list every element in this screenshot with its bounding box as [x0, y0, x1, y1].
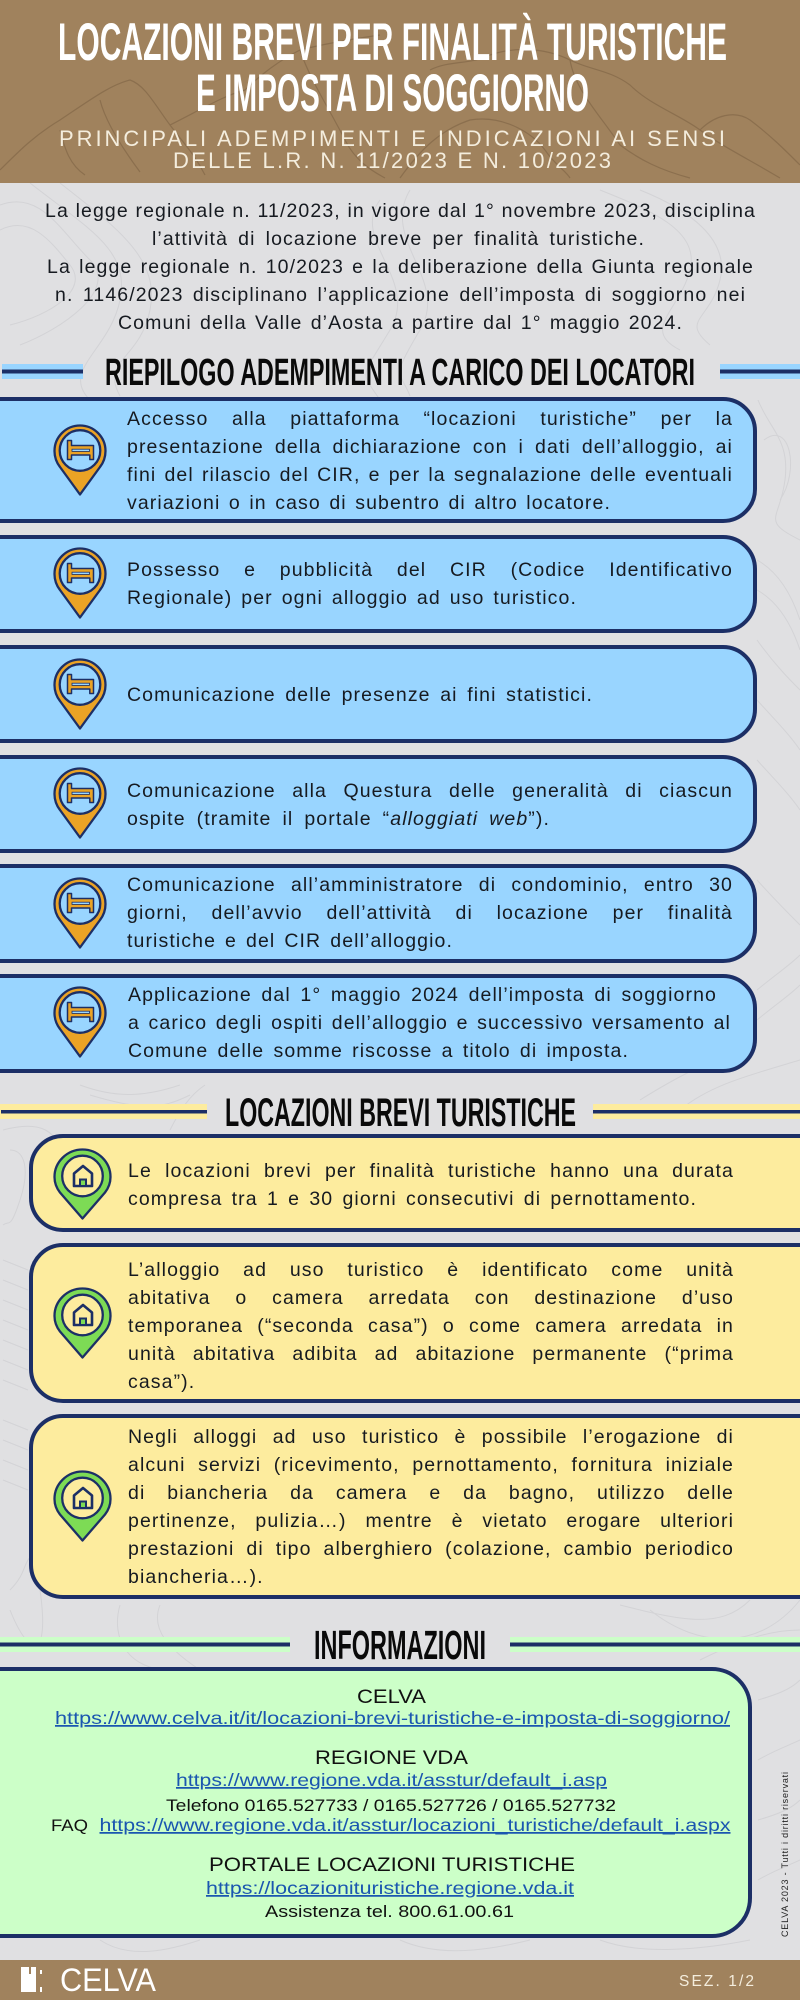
intro text: Comuni della Valle d’Aosta a partire dal 1° maggio 2024.	[118, 312, 683, 334]
icon: bed pin	[53, 986, 107, 1058]
text: servizi: biancheria…).	[128, 1566, 264, 1588]
text: questura: ospite (tramite il portale “alloggiati web”).	[127, 808, 550, 830]
intro text: La legge regionale n. 10/2023 e la deliberazione della Giunta regionale	[47, 256, 754, 278]
text: servizi: Negli alloggi ad uso turistico è possibile l’erogazione di	[128, 1426, 734, 1448]
panel: accesso alla piattaforma	[0, 397, 757, 523]
text: questura: Comunicazione alla Questura delle generalità di ciascun	[127, 780, 733, 802]
text: condominio: Comunicazione all’amministratore di condominio, entro 30	[127, 874, 733, 896]
header banner	[0, 0, 800, 183]
panel: comunicazione questura	[0, 755, 757, 853]
contact: Regione VdA	[51, 1748, 731, 1836]
logo: CELVA	[21, 1962, 157, 1998]
icon: bed pin	[53, 658, 107, 730]
contact: Regione VdA: Telefono 0165.527733 / 0165.527726 / 0165.527732	[166, 1796, 616, 1815]
text: condominio: giorni, dell’avvio dell’attività di locazione per finalità	[127, 902, 733, 924]
panel: servizi	[29, 1414, 800, 1599]
text: accesso: fini del rilascio del CIR, e per la segnalazione delle eventuali	[127, 464, 733, 486]
icon: bed pin	[53, 424, 107, 496]
text: alloggio: temporanea (“seconda casa”) o come camera arredata in	[128, 1315, 734, 1337]
subtitle: PRINCIPALI ADEMPIMENTI E INDICAZIONI AI SENSI	[59, 126, 725, 151]
icon: house pin	[53, 1148, 112, 1220]
text: possesso: Regionale) per ogni alloggio ad uso turistico.	[127, 587, 577, 609]
panel: comunicazione presenze	[0, 645, 757, 743]
contact: portale: https://locazionituristiche.regione.vda.it	[206, 1878, 574, 1898]
contact: portale: Assistenza tel. 800.61.00.61	[265, 1902, 514, 1921]
logo: CELVA: CELVA	[60, 1962, 157, 1998]
section number: SEZ. 1/2	[679, 1973, 754, 1990]
title	[58, 12, 727, 123]
text: servizi: pertinenze, pulizia…) mentre è vietato erogare ulteriori	[128, 1510, 734, 1532]
text: accesso: variazioni o in caso di subentro di altro locatore.	[127, 492, 611, 514]
intro text: La legge regionale n. 11/2023, in vigore dal 1° novembre 2023, disciplina	[45, 200, 756, 222]
text: durata: Le locazioni brevi per finalità turistiche hanno una durata	[128, 1160, 734, 1182]
text: alloggio: casa”).	[128, 1371, 195, 1393]
text: imposta: Comune delle somme riscosse a titolo di imposta.	[128, 1040, 629, 1062]
panel: informazioni	[0, 1667, 752, 1938]
subtitle	[59, 126, 725, 173]
panel: amministratore di condominio	[0, 864, 757, 963]
text: servizi: di biancheria da camera e da bagno, utilizzo delle	[128, 1482, 734, 1504]
contact: Regione VdA: REGIONE VDA	[315, 1748, 468, 1769]
text: condominio	[127, 874, 733, 952]
footer band	[0, 1960, 800, 2000]
contact: Regione VdA: https://www.regione.vda.it/asstur/locazioni_turistiche/default_i.aspx	[100, 1815, 731, 1836]
text: imposta: a carico degli ospiti dell’alloggio e successivo versamento al	[128, 1012, 731, 1034]
icon: bed pin	[53, 877, 107, 949]
text: accesso: presentazione della dichiarazione con i dati dell’alloggio, ai	[127, 436, 733, 458]
panel: possesso CIR	[0, 535, 757, 633]
contact: Regione VdA: FAQ	[51, 1816, 88, 1835]
contact: portale	[206, 1855, 575, 1921]
icon: bed pin	[53, 767, 107, 839]
text: alloggio: abitativa o camera arredata con destinazione d’uso	[128, 1287, 734, 1309]
icon: house pin	[53, 1470, 112, 1542]
intro text	[45, 200, 756, 334]
panel: alloggio ad uso turistico	[29, 1243, 800, 1403]
panel: imposta di soggiorno	[0, 974, 757, 1073]
text: durata	[128, 1160, 734, 1210]
text: alloggio: L’alloggio ad uso turistico è identificato come unità	[128, 1259, 734, 1281]
subtitle: DELLE L.R. N. 11/2023 E N. 10/2023	[173, 148, 611, 173]
contact: CELVA: CELVA	[357, 1687, 426, 1708]
panel: durata	[29, 1134, 800, 1232]
text: questura	[127, 780, 733, 830]
text: servizi: prestazioni di tipo alberghiero (colazione, cambio periodico	[128, 1538, 734, 1560]
copyright vertical text: CELVA 2023 - Tutti i diritti riservati	[780, 1772, 790, 1937]
contact: CELVA: https://www.celva.it/it/locazioni-brevi-turistiche-e-imposta-di-soggiorno/	[55, 1708, 730, 1728]
text: accesso	[127, 408, 733, 514]
text: accesso: Accesso alla piattaforma “locazioni turistiche” per la	[127, 408, 733, 430]
intro text: n. 1146/2023 disciplinano l’applicazione dell’imposta di soggiorno nei	[55, 284, 746, 306]
icon: bed pin	[53, 547, 107, 619]
text: imposta	[128, 984, 731, 1062]
contact: CELVA	[55, 1687, 730, 1728]
text: possesso: Possesso e pubblicità del CIR (Codice Identificativo	[127, 559, 733, 581]
intro text: l’attività di locazione breve per finalità turistiche.	[152, 228, 645, 250]
text: condominio: turistiche e del CIR dell’alloggio.	[127, 930, 453, 952]
text: servizi	[128, 1426, 734, 1588]
text: alloggio	[128, 1259, 734, 1393]
text: imposta: Applicazione dal 1° maggio 2024 dell’imposta di soggiorno	[128, 984, 717, 1006]
text: possesso	[127, 559, 733, 609]
text: durata: compresa tra 1 e 30 giorni consecutivi di pernottamento.	[128, 1188, 697, 1210]
text: servizi: alcuni servizi (ricevimento, pernottamento, fornitura iniziale	[128, 1454, 734, 1476]
text: alloggio: unità abitativa adibita ad abitazione permanente (“prima	[128, 1343, 734, 1365]
text: presenze: Comunicazione delle presenze ai fini statistici.	[127, 684, 593, 706]
contact: Regione VdA: https://www.regione.vda.it/asstur/default_i.asp	[176, 1770, 607, 1791]
icon: house pin	[53, 1287, 112, 1359]
heading: informazioni	[0, 1624, 800, 1664]
contact: portale: PORTALE LOCAZIONI TURISTICHE	[209, 1855, 575, 1876]
